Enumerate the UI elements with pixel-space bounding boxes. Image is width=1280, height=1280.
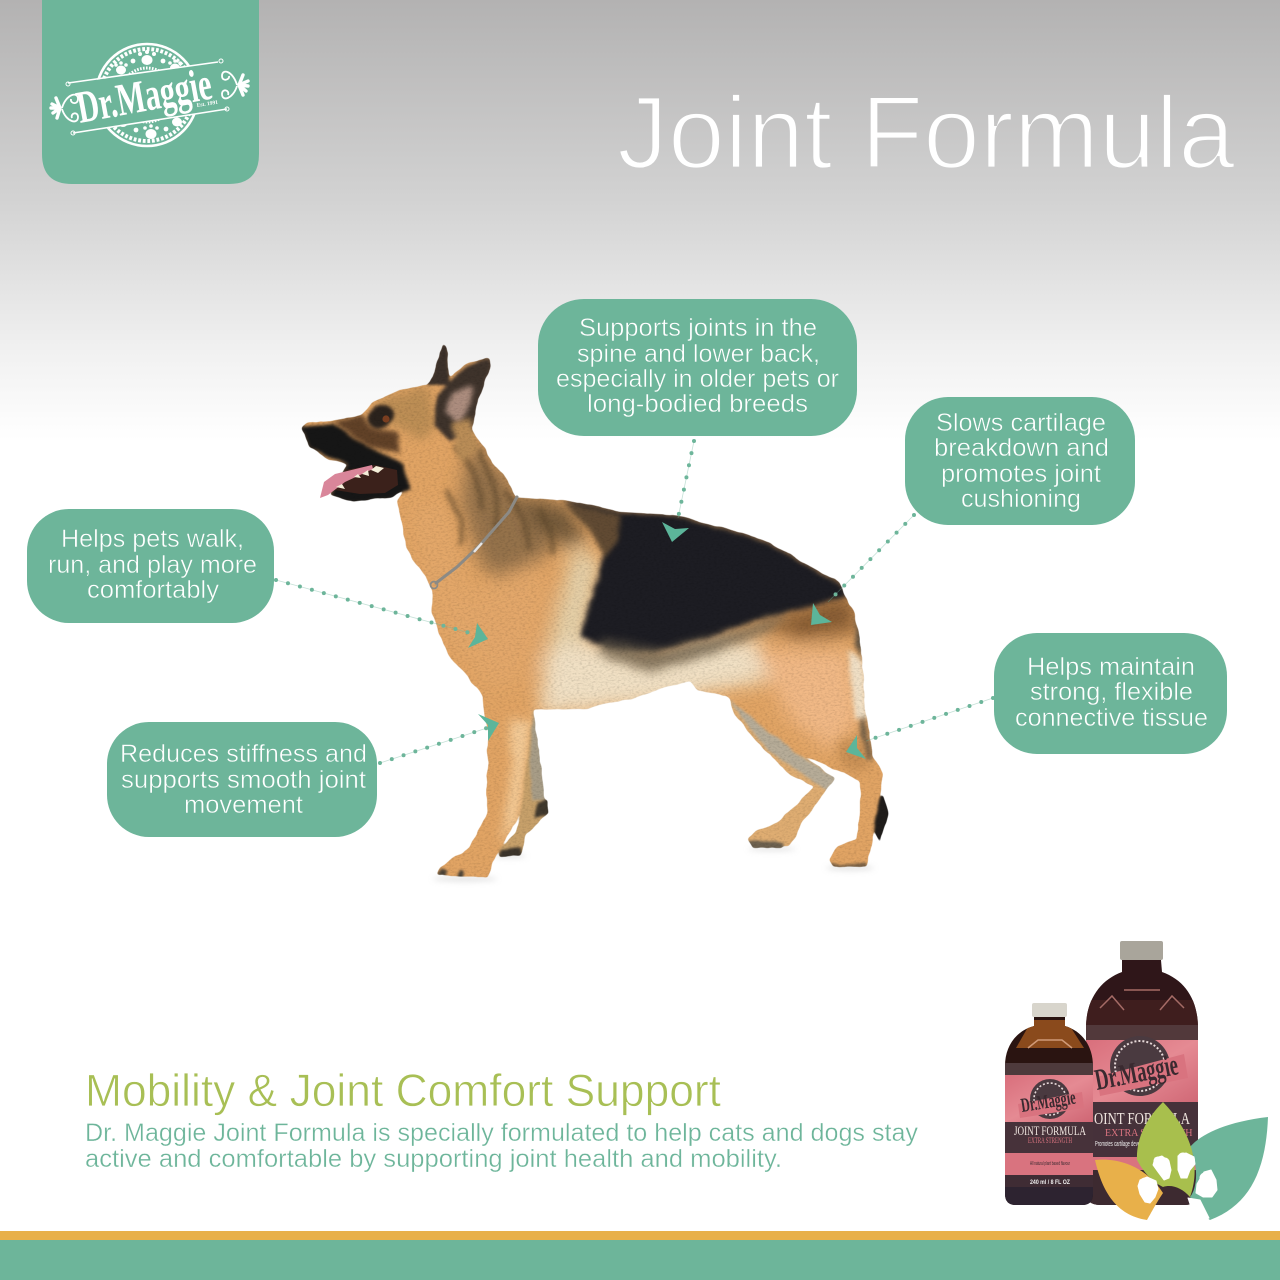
orange leaf (1095, 1160, 1163, 1220)
callout: connective tissue (994, 633, 1227, 754)
callout: spine: Supports joints in the (579, 314, 817, 342)
cream belly (540, 640, 770, 715)
callout: cartilage: cushioning (961, 485, 1081, 513)
tongue (320, 465, 373, 498)
hind leg edge cream (848, 650, 868, 720)
product: large bottle: Promotes cartilage development (1095, 1141, 1155, 1148)
heading: Mobility & Joint Comfort Support (85, 1065, 721, 1116)
product: small bottle: 240 ml / 8 FL OZ (1030, 1179, 1070, 1186)
shoulder dark (520, 495, 590, 545)
flank brown under rump (760, 590, 860, 640)
muzzle brown (333, 415, 400, 453)
head detail (300, 344, 491, 504)
mouth (320, 465, 398, 498)
cream shoulder stripe (545, 545, 600, 680)
product: large bottle: OINT FORMULA (1094, 1109, 1191, 1128)
thigh (755, 650, 860, 750)
ear base tan (452, 418, 478, 462)
large cap (1120, 941, 1163, 960)
arrow: shoulder (276, 580, 488, 648)
logo: round paw badge (96, 44, 198, 146)
logo panel (42, 0, 259, 184)
teal leaf (1190, 1117, 1268, 1220)
callout: stiffness (107, 722, 377, 837)
tail (873, 793, 888, 843)
background gradient (0, 0, 1280, 440)
product: small bottle (1005, 1003, 1093, 1205)
footer green bar (0, 1240, 1280, 1280)
ground shadow (433, 847, 874, 882)
arrow: knee (846, 698, 993, 759)
small cap (1032, 1003, 1067, 1017)
callout: cartilage: promotes joint (941, 460, 1101, 488)
neck fur streaks (445, 445, 553, 555)
callout: spine: especially in older pets or (556, 365, 839, 393)
near ear (434, 358, 491, 440)
eye patch (365, 402, 396, 431)
callout: stiffness: supports smooth joint (121, 766, 366, 794)
callout: walk and play: run, and play more (48, 551, 257, 579)
product: small bottle: JOINT FORMULA (1014, 1123, 1086, 1138)
teeth (336, 466, 384, 489)
far hind leg (725, 690, 835, 848)
callout: connective tissue: strong, flexible (1030, 678, 1193, 706)
callout: walk and play (27, 509, 274, 623)
body silhouette with coat colours (290, 335, 900, 885)
far ear (427, 344, 449, 385)
dog photo illustration (290, 335, 900, 885)
callout: spine: spine and lower back, (577, 340, 820, 368)
callout: walk and play: Helps pets walk, (61, 525, 244, 553)
white paw prints (1138, 1153, 1217, 1222)
far front leg (499, 700, 548, 857)
product: small bottle: All natural plant based flavour (1030, 1161, 1070, 1167)
description (85, 1119, 918, 1173)
eye (382, 415, 390, 423)
black saddle (563, 500, 848, 653)
logo: banner with wordmark: Est. 1991 (196, 100, 219, 109)
hock shading (835, 735, 870, 770)
description: Dr. Maggie Joint Formula is specially formulated to help cats and dogs stay (85, 1119, 918, 1147)
callout: cartilage (905, 397, 1135, 525)
muzzle black (300, 423, 410, 504)
callout: cartilage: Slows cartilage (936, 409, 1106, 437)
product: small bottle: Dr.Maggie (1019, 1087, 1077, 1117)
logo: left flourish (51, 95, 78, 121)
green leaf (1137, 1102, 1195, 1197)
inner ear (445, 386, 474, 424)
callout: walk and play: comfortably (87, 576, 220, 604)
logo: right flourish (222, 72, 248, 98)
arrow: elbow (380, 714, 499, 763)
leaf icon (1095, 1102, 1268, 1222)
description: active and comfortable by supporting joint health and mobility. (85, 1145, 782, 1173)
product: large bottle: Dr.Maggie (1092, 1048, 1181, 1097)
toes (436, 862, 868, 878)
logo: banner with wordmark (66, 58, 229, 135)
callout: connective tissue: Helps maintain (1027, 653, 1195, 681)
product: large bottle: EXTRA STRENGTH (1105, 1128, 1192, 1139)
neck shading (460, 432, 555, 590)
front leg highlight (500, 720, 532, 845)
product: small bottle: EXTRA STRENGTH (1028, 1136, 1072, 1145)
product: large bottle (1086, 941, 1198, 1205)
callout: stiffness: movement (184, 791, 303, 819)
callout: stiffness: Reduces stiffness and (120, 740, 367, 768)
head tan shading (373, 385, 437, 440)
callout: spine: long-bodied breeds (587, 390, 808, 418)
arrow: spine (662, 441, 694, 542)
footer orange stripe (0, 1231, 1280, 1240)
arrow: hip (811, 515, 914, 625)
logo: banner with wordmark: Dr.Maggie (73, 58, 216, 133)
dog coat and body (290, 335, 900, 885)
title: Joint Formula (617, 75, 1236, 190)
chest orange (426, 554, 545, 658)
hind leg dark edge (855, 615, 873, 760)
callout: spine (538, 299, 857, 436)
collar chain (430, 497, 517, 588)
callout: connective tissue: connective tissue (1015, 704, 1208, 732)
saddle lower fade (600, 612, 790, 672)
callout: cartilage: breakdown and (934, 434, 1109, 462)
saddle tan streak (563, 503, 620, 558)
